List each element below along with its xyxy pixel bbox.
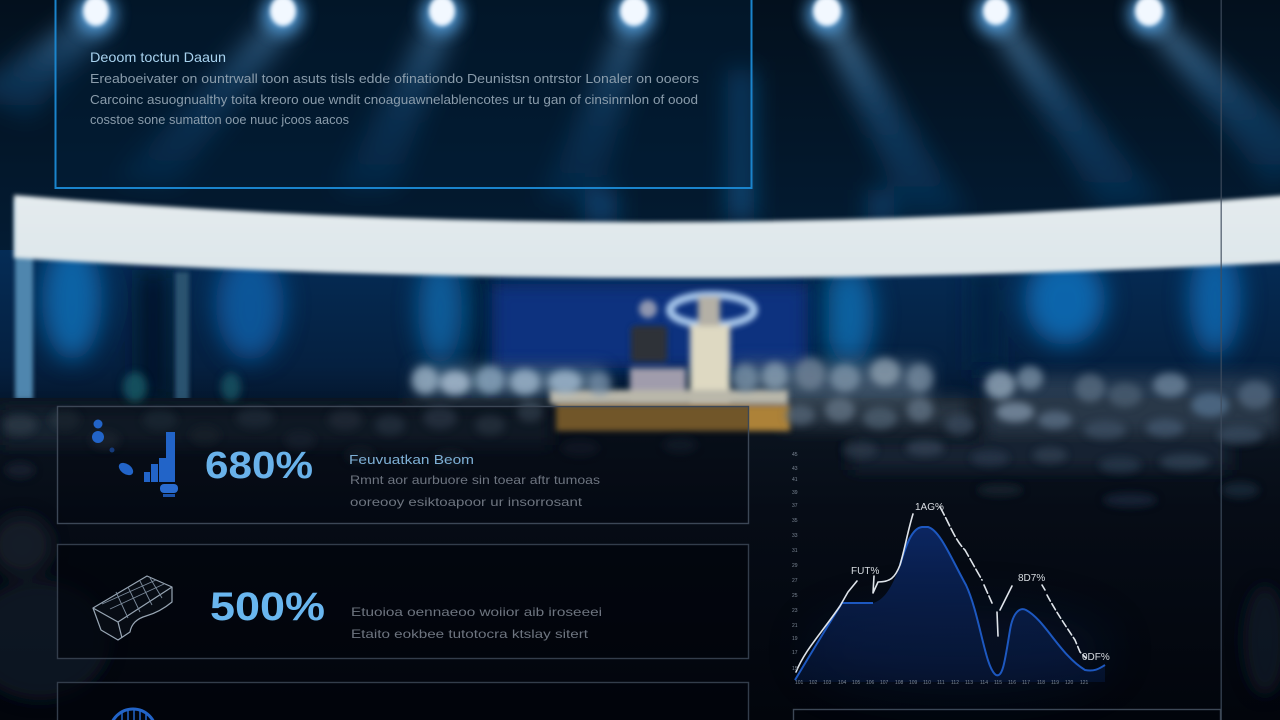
blue area series bbox=[795, 527, 1105, 682]
panel: stat row 1 bbox=[58, 406, 748, 524]
chart glow bbox=[810, 610, 1110, 690]
y axis labels: 39 bbox=[792, 490, 798, 496]
body text bbox=[90, 72, 699, 127]
y axis labels: 15 bbox=[792, 666, 798, 672]
background: spotlight beams bbox=[0, 15, 1280, 224]
y axis labels: 23 bbox=[792, 608, 798, 614]
x axis labels: 102 bbox=[809, 680, 818, 686]
icon: blue dots and bars bbox=[92, 420, 178, 497]
data labels: 8D7% bbox=[1018, 573, 1045, 584]
stat description: Etuoioa oennaeoo woiior aib iroseeei bbox=[351, 605, 602, 619]
stat description: Rmnt aor aurbuore sin toear aftr tumoas bbox=[350, 473, 600, 487]
panel: stat row 2 bbox=[58, 544, 748, 658]
audience silhouettes bbox=[0, 515, 1280, 700]
line chart bbox=[792, 452, 1110, 690]
panel: intro text bbox=[56, 0, 752, 188]
x axis labels: 101 bbox=[795, 680, 804, 686]
background: audience bbox=[0, 398, 1280, 720]
x axis labels: 105 bbox=[852, 680, 861, 686]
audience: mottled heads bbox=[3, 358, 1272, 507]
stat description: Etaito eokbee tutotocra ktslay sitert bbox=[351, 627, 589, 641]
spotlights bbox=[76, 0, 1169, 34]
heading: Deoom toctun Daaun bbox=[90, 49, 226, 65]
x axis labels bbox=[795, 680, 1089, 686]
body text: Ereaboeivater on ountrwall toon asuts tisls edde ofinationdo Deunistsn ontrstor Lonaler on ooeors bbox=[90, 72, 699, 86]
x axis labels: 116 bbox=[1008, 680, 1016, 686]
y axis labels: 21 bbox=[792, 623, 798, 629]
stat heading: Feuvuatkan Beom bbox=[349, 452, 474, 467]
x axis labels: 110 bbox=[923, 680, 931, 686]
x axis labels: 118 bbox=[1037, 680, 1045, 686]
y axis labels: 17 bbox=[792, 650, 798, 656]
x axis labels: 103 bbox=[823, 680, 832, 686]
x axis labels: 107 bbox=[880, 680, 889, 686]
stat description bbox=[351, 605, 602, 641]
x axis labels: 111 bbox=[937, 680, 945, 686]
x axis labels: 104 bbox=[838, 680, 847, 686]
body text: cosstoe sone sumatton ooe nuuc jcoos aacos bbox=[90, 113, 349, 127]
data labels: 0DF% bbox=[1082, 652, 1110, 663]
data labels: 1AG% bbox=[915, 502, 944, 513]
speaker and podium bbox=[630, 295, 754, 403]
data labels: FUT% bbox=[851, 566, 879, 577]
white dashed trend line bbox=[796, 507, 1086, 672]
y axis labels: 35 bbox=[792, 518, 798, 524]
y axis labels: 29 bbox=[792, 563, 798, 569]
background: ceiling bbox=[0, 0, 1280, 262]
audience: soft base glow bbox=[0, 362, 1280, 470]
y axis labels: 19 bbox=[792, 636, 798, 642]
y axis labels bbox=[792, 452, 798, 672]
panel: bottom right bbox=[794, 710, 1220, 720]
y axis labels: 37 bbox=[792, 503, 798, 509]
x axis labels: 121 bbox=[1080, 680, 1089, 686]
y axis labels: 43 bbox=[792, 466, 798, 472]
stat description bbox=[350, 473, 600, 509]
data labels bbox=[851, 502, 1110, 663]
stage table bbox=[550, 390, 790, 431]
panel: stat row 3 bbox=[58, 682, 748, 720]
x axis labels: 115 bbox=[994, 680, 1002, 686]
background: stage wall bbox=[0, 200, 1280, 415]
y axis labels: 45 bbox=[792, 452, 798, 458]
white curved banner bbox=[14, 195, 1280, 278]
x axis labels: 120 bbox=[1065, 680, 1074, 686]
x axis labels: 113 bbox=[965, 680, 973, 686]
stat description: ooreooy esiktoapoor ur insorrosant bbox=[350, 495, 583, 509]
blue line bbox=[795, 527, 1105, 680]
x axis labels: 114 bbox=[980, 680, 988, 686]
icon: keyboard block bbox=[93, 576, 172, 640]
x axis labels: 106 bbox=[866, 680, 875, 686]
y axis labels: 27 bbox=[792, 578, 798, 584]
x axis labels: 117 bbox=[1022, 680, 1030, 686]
x axis labels: 112 bbox=[951, 680, 959, 686]
x axis labels: 108 bbox=[895, 680, 904, 686]
right frame line bbox=[1220, 0, 1222, 720]
y axis labels: 41 bbox=[792, 477, 798, 483]
y axis labels: 33 bbox=[792, 533, 798, 539]
stat value: 500% bbox=[210, 585, 325, 629]
stat value: 680% bbox=[205, 445, 313, 487]
y axis labels: 25 bbox=[792, 593, 798, 599]
x axis labels: 109 bbox=[909, 680, 918, 686]
x axis labels: 119 bbox=[1051, 680, 1059, 686]
icon: globe bbox=[110, 709, 156, 720]
body text: Carcoinc asuognualthy toita kreoro oue wndit cnoaguawnelablencotes ur tu gan of cinsinrnlon of oood bbox=[90, 93, 698, 107]
y axis labels: 31 bbox=[792, 548, 798, 554]
